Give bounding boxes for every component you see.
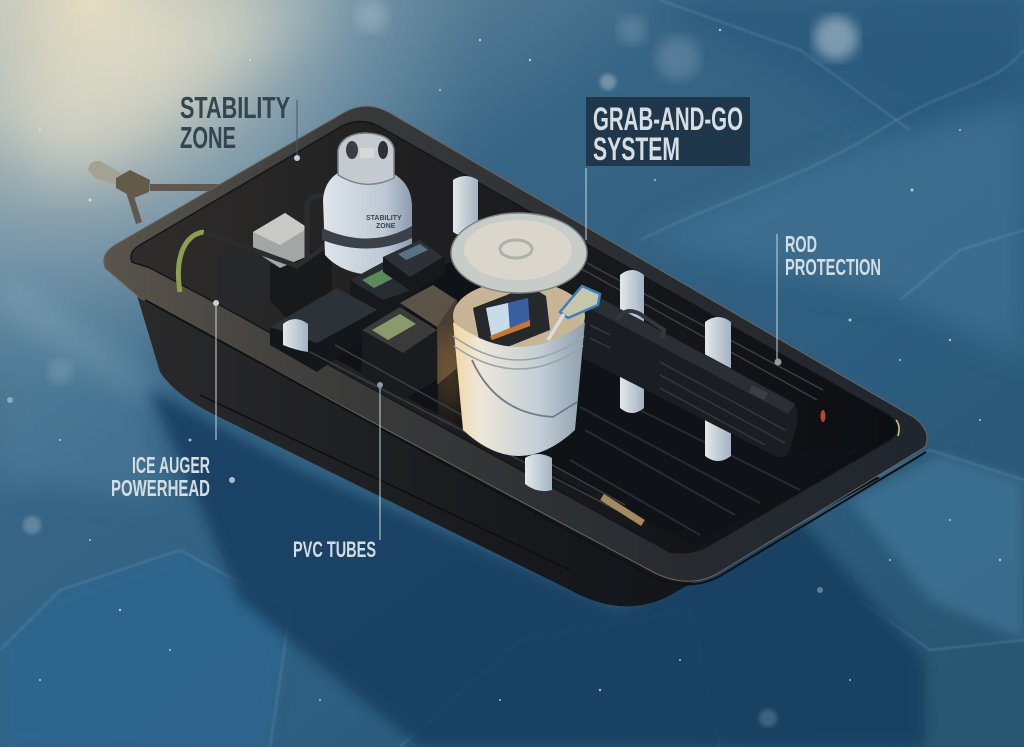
sled rim	[104, 106, 927, 581]
PVC tube: left	[283, 319, 308, 352]
fishing rods behind case	[580, 263, 823, 400]
label: rod protection: PROTECTION	[785, 254, 881, 280]
left battery	[270, 288, 377, 372]
label: rod protection: ROD	[785, 231, 817, 257]
fishing rods front	[310, 345, 643, 523]
leader line: PVC tubes	[377, 382, 383, 540]
highlight on corner	[896, 420, 899, 436]
label: grab-and-go system: SYSTEM	[593, 131, 680, 167]
leader line: grab and go	[585, 168, 587, 240]
label: grab-and-go system	[586, 97, 750, 167]
leader line: ice auger	[213, 300, 219, 440]
sled floor ribs	[570, 400, 800, 535]
label: ice auger powerhead: POWERHEAD	[111, 475, 210, 501]
front battery	[362, 330, 437, 400]
bucket with fish finder and net	[451, 213, 600, 456]
leader line: rod protection	[774, 234, 782, 366]
sled shadow on ice	[150, 390, 925, 747]
PVC tube: middle	[620, 270, 644, 413]
landing net	[548, 286, 600, 340]
sled floor	[300, 262, 860, 545]
bucket wall	[453, 322, 585, 456]
propane tank	[322, 133, 412, 274]
rod case	[583, 298, 798, 457]
sled hull exterior	[136, 200, 880, 606]
propane tank: STABILITY	[366, 215, 402, 222]
PVC tube: right	[705, 317, 731, 461]
label: stability zone: ZONE	[180, 120, 236, 155]
label: ice auger powerhead	[111, 452, 210, 501]
bucket lid	[451, 213, 587, 293]
propane tank: ZONE	[376, 223, 396, 230]
label: rod protection	[785, 231, 881, 280]
fish finder	[473, 286, 550, 350]
leader line: stability zone	[294, 100, 300, 161]
PVC tube: back	[453, 176, 478, 236]
back batteries	[350, 260, 420, 322]
batteries	[270, 240, 457, 400]
PVC tube: front	[525, 454, 552, 491]
sled	[104, 106, 927, 606]
PVC tubes	[283, 176, 731, 461]
sled hitch	[88, 161, 220, 224]
label: PVC tubes: PVC TUBES	[293, 537, 376, 562]
auger powerhead	[178, 195, 342, 322]
label: grab-and-go system: GRAB-AND-GO	[593, 101, 743, 137]
sled inner tub	[131, 121, 898, 553]
label: stability zone	[180, 90, 290, 155]
sun glow behind bucket	[440, 333, 460, 417]
beige battery	[400, 285, 457, 385]
float	[820, 410, 826, 422]
label: ice auger powerhead: ICE AUGER	[132, 452, 210, 478]
label: stability zone: STABILITY	[180, 90, 290, 125]
